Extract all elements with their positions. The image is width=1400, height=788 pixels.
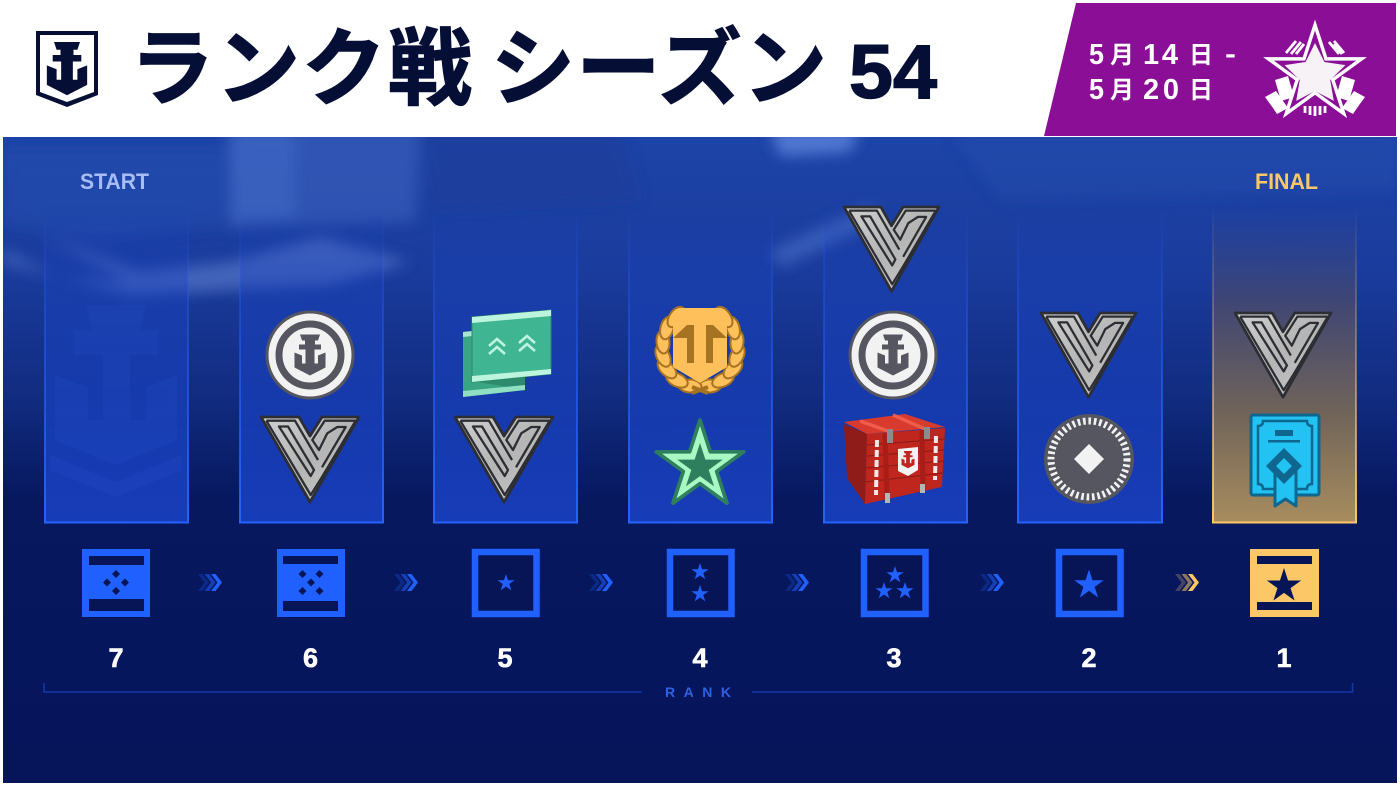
date text: 5 (1089, 39, 1104, 71)
rank numbers: 4 (692, 643, 708, 673)
arrow (394, 574, 418, 591)
arrow (589, 574, 613, 591)
date text: 14 (1143, 39, 1178, 71)
rank numbers: 1 (1276, 643, 1292, 673)
icon: gear disc (1044, 414, 1134, 504)
rank 1 column (1213, 205, 1356, 523)
title: 54 (849, 30, 937, 115)
date text: 5 (1089, 74, 1104, 106)
rank 3 column (824, 205, 967, 523)
icon: star emblem (1265, 25, 1365, 116)
date text: 日 (1189, 35, 1213, 70)
label: START: START (80, 169, 150, 194)
rank bracket axis (44, 683, 1352, 700)
title icon: shield logo (36, 31, 98, 107)
date text: 20 (1143, 74, 1179, 106)
date banner (1044, 3, 1396, 136)
rank 6 badge (277, 549, 345, 617)
date text: 月 (1110, 35, 1134, 70)
icon: silver V (1235, 313, 1331, 397)
rank numbers (108, 643, 1292, 673)
date text (1089, 35, 1236, 106)
axis label: RANK (665, 684, 731, 700)
icon: gold wreath (652, 304, 748, 393)
rank 6 column (240, 205, 383, 523)
rank 5 column (434, 205, 577, 523)
rank 2 column (1018, 205, 1162, 523)
arrow (785, 574, 809, 591)
rank 7 badge (82, 549, 150, 617)
rank 7 column (45, 205, 188, 523)
date text: 日 (1189, 70, 1213, 105)
date text: 月 (1110, 70, 1134, 105)
icon: coin (850, 312, 936, 398)
arrow (980, 574, 1004, 591)
title: ランク戦 (130, 2, 472, 123)
label: FINAL: FINAL (1255, 169, 1318, 194)
icon: green star (656, 420, 744, 503)
rank 2 badge (1059, 552, 1120, 614)
rank 1 badge (1250, 549, 1319, 617)
icon: coin (267, 312, 353, 398)
arrow: gold (1175, 574, 1199, 591)
rank numbers: 7 (108, 643, 124, 673)
icon: silver V (1041, 313, 1136, 397)
icon: red crate (844, 414, 945, 504)
rank numbers: 5 (497, 643, 513, 673)
icon: silver V (455, 417, 553, 502)
ghost logo (50, 305, 182, 497)
rank numbers: 6 (303, 643, 318, 673)
rank numbers: 2 (1081, 643, 1097, 673)
title: シーズン (491, 2, 827, 123)
date text: - (1225, 39, 1236, 69)
icon: silver V (261, 417, 359, 502)
rank numbers: 3 (886, 643, 902, 673)
title (130, 2, 937, 123)
rank 4 badge (670, 552, 732, 614)
arrow (198, 574, 222, 591)
rank 3 badge (864, 552, 926, 614)
icon: green banner (463, 310, 551, 397)
rank 4 column (629, 205, 772, 523)
icon: silver V (844, 207, 939, 291)
rank 5 badge (475, 552, 536, 614)
icon: blue certificate (1251, 415, 1319, 506)
